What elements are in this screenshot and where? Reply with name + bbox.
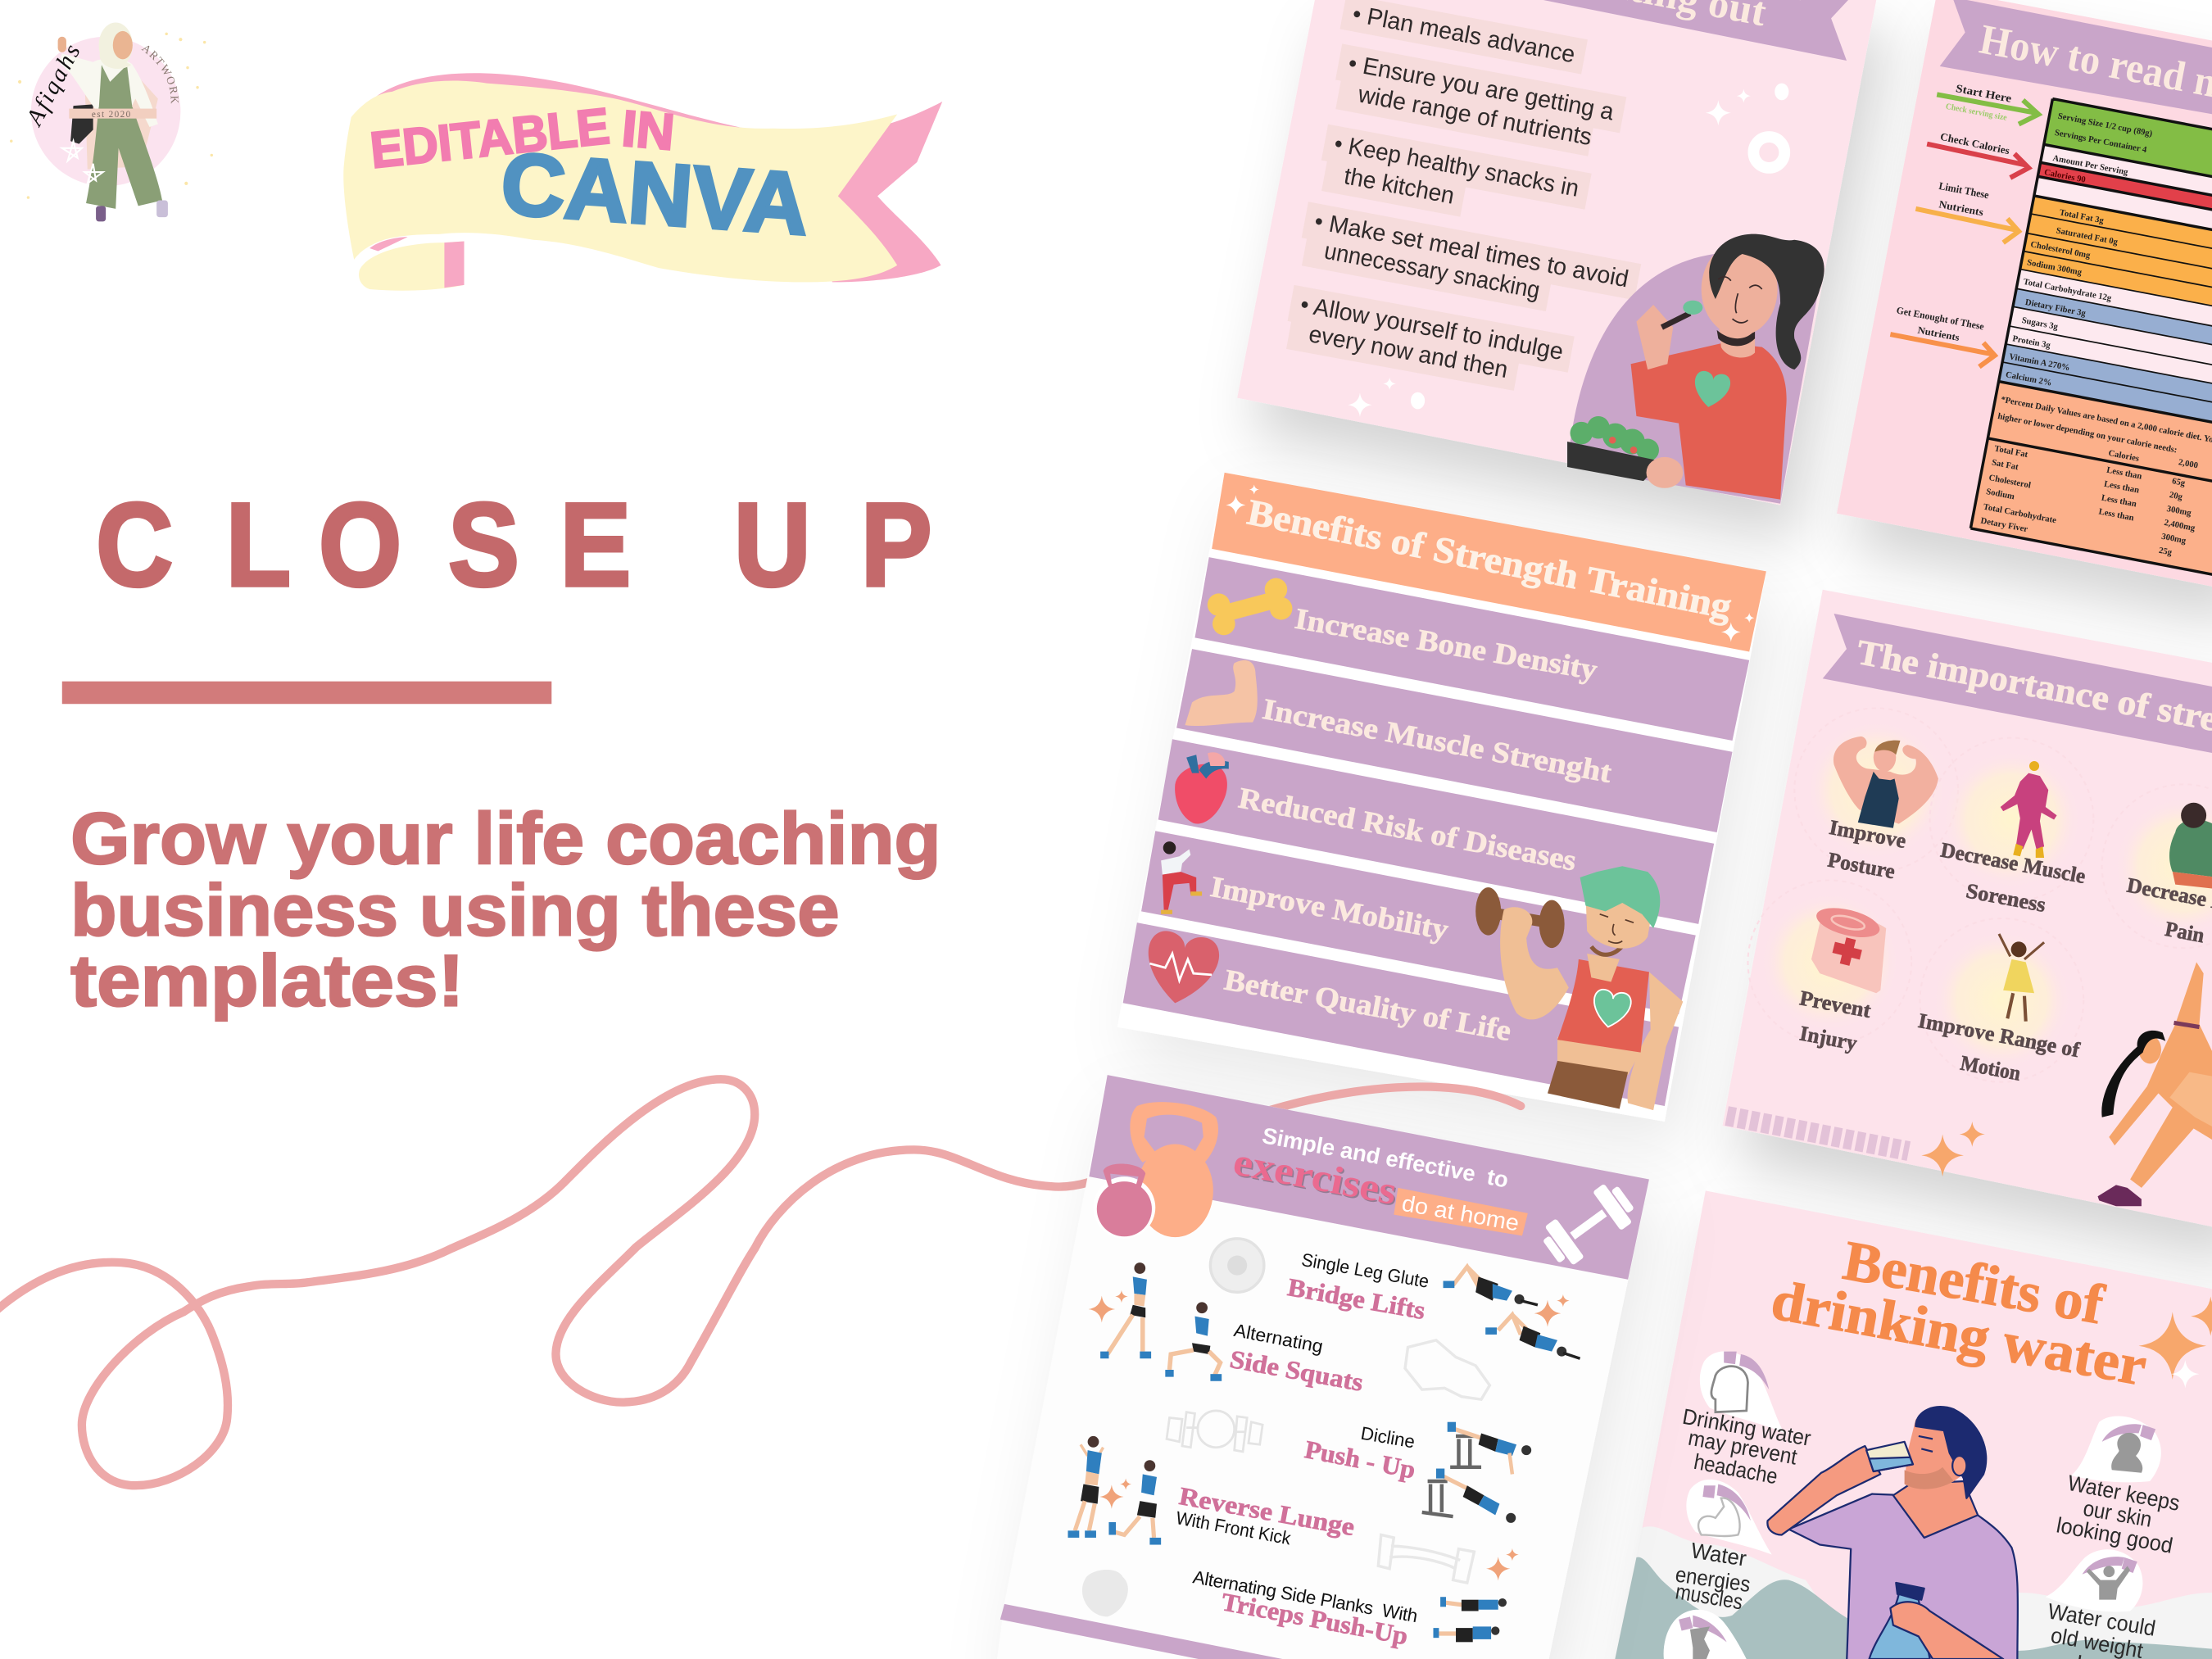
- label: improve posture: Improve: [1828, 815, 1908, 853]
- label: improve posture: [1826, 815, 1908, 883]
- tip list: wide range of nutrients: [1355, 81, 1593, 151]
- benefit circles: [1747, 708, 2212, 1082]
- icon: dumbbell: [1537, 1178, 1640, 1271]
- nutrition table: 20g: [2169, 490, 2184, 502]
- text: skin: our skin: [2082, 1496, 2154, 1532]
- tip list: every now and then: [1307, 321, 1510, 383]
- panel: benefits of strength training: [1117, 473, 1766, 1122]
- sparkles: [1921, 1122, 1985, 1176]
- banner tail: [369, 237, 408, 252]
- text: muscles: Water: [1689, 1538, 1748, 1571]
- nutrition table: Sodium 300mg: [2026, 257, 2083, 278]
- nutrition table: Vitamin A 270%: [2008, 351, 2071, 373]
- arrow: get enough nutrients: Get Enought of These: [1896, 304, 1986, 333]
- banner cream flag: [343, 81, 897, 282]
- row: reduced risk: Reduced Risk of Diseases: [1236, 782, 1579, 877]
- footer strip: [1000, 1604, 1411, 1659]
- text: headache: headache: [1692, 1449, 1779, 1489]
- heading text: Simple and effective to: [1260, 1122, 1511, 1193]
- divider bar: [62, 682, 551, 704]
- label: decrease muscle soreness: Soreness: [1965, 879, 2047, 917]
- stripe decoration: [1727, 1116, 1909, 1151]
- panel: how to read nutrition labels: [1837, 0, 2212, 590]
- background gym icons: [1082, 1239, 1489, 1616]
- row: push up: Dicline: [1359, 1423, 1416, 1453]
- heading text: exercises: [1231, 1141, 1402, 1215]
- nutrition table: Total Carbohydrate 12g: [2023, 277, 2113, 303]
- nutrition table: Sodium: [1985, 487, 2015, 501]
- row: push up: Push - Up: [1303, 1435, 1418, 1484]
- icon: people hugging: [2169, 803, 2212, 889]
- subheading: templates!: [70, 940, 465, 1022]
- panel: benefits of drinking water: [1614, 1190, 2212, 1659]
- label: decrease back pain: Pain: [2163, 917, 2206, 947]
- text: skin: Water keeps: [2066, 1471, 2182, 1516]
- nutrition table: Detary Fiver: [1980, 516, 2028, 534]
- arrow: check calories: [1927, 130, 2028, 178]
- nutrition table: Cholesterol: [1988, 473, 2032, 491]
- row: reduced risk: [1158, 739, 1714, 924]
- label: prevent injury: [1797, 986, 1873, 1055]
- sparkles: [1088, 1290, 1570, 1580]
- title: drinking water: [1767, 1268, 2151, 1398]
- tip list: the kitchen: [1342, 163, 1457, 210]
- icon: kettlebells: [1094, 1102, 1218, 1239]
- label: decrease muscle soreness: Decrease Muscle: [1939, 838, 2087, 888]
- tip list: • Keep healthy snacks in: [1332, 131, 1581, 202]
- row: reverse lunge: With Front Kick: [1174, 1507, 1293, 1549]
- heading: close up: CLOSEUP: [96, 478, 932, 611]
- row: side squats: Side Squats: [1228, 1344, 1366, 1397]
- nutrition table: Saturated Fat 0g: [2056, 225, 2119, 247]
- row: muscle strength: [1176, 649, 1733, 832]
- text: weight: [2047, 1598, 2157, 1659]
- panel: meal planning tips: [1237, 0, 1878, 505]
- callout: headache: [1700, 1351, 1784, 1433]
- icon: muscle body: [2001, 761, 2057, 858]
- illustration: woman eating salad: [1567, 234, 1824, 504]
- label: prevent injury: Injury: [1797, 1021, 1859, 1055]
- header band: [1089, 1075, 1649, 1280]
- figure: glute bridge: [1444, 1267, 1580, 1358]
- nutrition table: Total Fat 3g: [2059, 207, 2105, 226]
- heading text: exercises: [1230, 1140, 1400, 1213]
- text: muscles: [1674, 1538, 1752, 1615]
- icon: happy girl: [1999, 934, 2044, 1022]
- arrow: get enough nutrients: [1890, 304, 1995, 367]
- sparkles: [2138, 1296, 2212, 1388]
- illustration: man lifting dumbbell: [1475, 866, 1683, 1110]
- heading: canva: CANVA: [498, 134, 812, 253]
- nutrition table: Sugars 3g: [2021, 315, 2060, 332]
- nutrition table: Calories 90: [2043, 167, 2087, 185]
- subheading: [70, 797, 941, 1022]
- label: improve range of motion: Motion: [1959, 1051, 2023, 1086]
- banner: editable in Canva: [343, 73, 942, 291]
- text: headache: may prevent: [1686, 1426, 1799, 1470]
- arrow: check calories: Check Calories: [1939, 130, 2010, 156]
- subheading: business using these: [70, 869, 840, 951]
- icon: bandage: [1811, 903, 1886, 993]
- nutrition table: 2,000: [2178, 457, 2199, 470]
- callout: muscles: [1686, 1480, 1772, 1555]
- row: side squats: Alternating: [1232, 1320, 1325, 1357]
- callout: joints: [1664, 1610, 1749, 1659]
- subheading: Grow your life coaching: [70, 797, 941, 879]
- text: headache: [1681, 1404, 1813, 1489]
- label: improve range of motion: [1916, 1009, 2082, 1086]
- label: prevent injury: Prevent: [1797, 986, 1873, 1022]
- banner back ribbon: [369, 73, 942, 282]
- label: improve range of motion: Improve Range of: [1916, 1009, 2082, 1062]
- arrow: start here: Start Here: [1955, 82, 2013, 105]
- text: skin: looking good: [2055, 1512, 2175, 1558]
- row: triceps push up: Alternating Side Planks With: [1191, 1566, 1419, 1626]
- nutrition table: Calcium 2%: [2005, 369, 2052, 388]
- text: weight: Water could: [2047, 1598, 2157, 1641]
- header band: Benefits of Strength Training: [1244, 492, 1735, 627]
- text: muscles: muscles: [1674, 1579, 1744, 1615]
- row: bone density: Increase Bone Density: [1293, 602, 1600, 687]
- panel: exercises to do at home: [995, 1075, 1649, 1659]
- icon: muscle man: [1834, 737, 1938, 828]
- title ribbon: [1498, 0, 1851, 61]
- logo: Afiqah's Artwork: ARTWORK: [141, 46, 179, 103]
- tip list: • Allow yourself to indulge: [1299, 292, 1566, 365]
- nutrition table: Calories: [2108, 448, 2140, 464]
- nutrition table: 300mg: [2166, 504, 2192, 519]
- callout: weight: [2046, 1549, 2142, 1611]
- nutrition table: Protein 3g: [2011, 333, 2051, 351]
- logo: Afiqah's Artwork: Afiqahs: [20, 40, 86, 131]
- callout: skin: [2071, 1416, 2161, 1482]
- nutrition table: Less than: [2103, 479, 2140, 496]
- heading text: do at home: [1400, 1190, 1521, 1235]
- arrow: start here: [1937, 82, 2038, 125]
- tip list: • Ensure you are getting a: [1346, 51, 1616, 126]
- tip list: • Plan meals advance: [1350, 1, 1577, 68]
- text: skin: [2055, 1471, 2182, 1558]
- nutrition table: Amount Per Serving: [2052, 153, 2129, 177]
- nutrition table: Total Fat: [1993, 444, 2029, 460]
- label: improve posture: Posture: [1826, 848, 1897, 883]
- row: quality of life: Better Quality of Life: [1222, 963, 1514, 1047]
- nutrition table: [1970, 99, 2212, 587]
- label: decrease muscle soreness: [1939, 838, 2087, 917]
- nutrition table: 25g: [2158, 546, 2173, 558]
- hills: [1614, 1526, 2212, 1659]
- figure: side squats: [1100, 1262, 1222, 1381]
- heading: editable: EDITABLE: [368, 98, 612, 179]
- row: muscle strength: Increase Muscle Strenght: [1260, 692, 1614, 789]
- arrow: limit these nutrients: Limit These: [1938, 179, 1990, 201]
- row: quality of life: [1123, 922, 1679, 1106]
- nutrition table: Dietary Fiber 3g: [2024, 297, 2087, 319]
- illustration: man drinking water: [1767, 1407, 2018, 1659]
- nutrition table: Cholesterol 0mg: [2029, 239, 2092, 261]
- nutrition table: Less than: [2105, 465, 2142, 482]
- arrow: limit these nutrients: Nutrients: [1938, 197, 1984, 218]
- tip list: • Make set meal times to avoid: [1312, 208, 1630, 292]
- nutrition table: Less than: [2098, 506, 2135, 523]
- decorative skipping rope line: [0, 1079, 1521, 1485]
- logo: Afiqah's Artwork: [10, 23, 213, 221]
- arrow: start here: Check serving size: [1945, 102, 2008, 123]
- illustration: stretching woman: [2098, 962, 2212, 1206]
- header band: [1212, 473, 1766, 652]
- row: side squats: [1228, 1320, 1366, 1397]
- nutrition table: higher or lower depending on your calorie needs:: [1997, 411, 2178, 456]
- arrow: get enough nutrients: Nutrients: [1917, 324, 1960, 343]
- label: decrease back pain: [2125, 873, 2212, 947]
- nutrition table: 2,400mg: [2164, 518, 2196, 533]
- row: bridge lifts: Single Leg Glute: [1300, 1249, 1430, 1292]
- row: mobility: Improve Mobility: [1208, 870, 1451, 946]
- tip list: unnecessary snacking: [1322, 238, 1542, 304]
- row: reverse lunge: Reverse Lunge: [1177, 1481, 1357, 1541]
- panel: importance of strength training: [1722, 590, 2212, 1231]
- nutrition table: Sat Fat: [1991, 457, 2019, 473]
- tip list: [1286, 0, 1641, 391]
- figure: decline push up: [1422, 1422, 1531, 1523]
- row: bridge lifts: [1285, 1249, 1430, 1325]
- title: Benefits of: [1839, 1229, 2109, 1336]
- row: mobility: [1141, 831, 1696, 1014]
- logo: Afiqah's Artwork: est 2020: [92, 110, 132, 120]
- figure: reverse lunge: [1068, 1436, 1161, 1545]
- nutrition table: Total Carbohydrate: [1983, 502, 2057, 525]
- row: bridge lifts: Bridge Lifts: [1285, 1272, 1427, 1325]
- heading: in: IN: [619, 101, 677, 161]
- row: bone density: [1194, 557, 1749, 741]
- text: muscles: energies: [1674, 1562, 1752, 1597]
- figure: side planks: [1433, 1597, 1507, 1642]
- nutrition table: 65g: [2171, 476, 2187, 488]
- text: headache: Drinking water: [1681, 1404, 1813, 1451]
- nutrition table: Less than: [2101, 493, 2137, 509]
- nutrition table: Serving Size 1/2 cup (89g): [2057, 111, 2154, 138]
- nutrition table: Servings Per Container 4: [2054, 128, 2148, 155]
- decorative sparkles: [1348, 84, 1788, 417]
- nutrition table: 300mg: [2160, 532, 2187, 546]
- arrow: limit these nutrients: [1915, 179, 2019, 243]
- row: triceps push up: Triceps Push-Up: [1219, 1587, 1410, 1650]
- heading text: [1230, 1122, 1528, 1235]
